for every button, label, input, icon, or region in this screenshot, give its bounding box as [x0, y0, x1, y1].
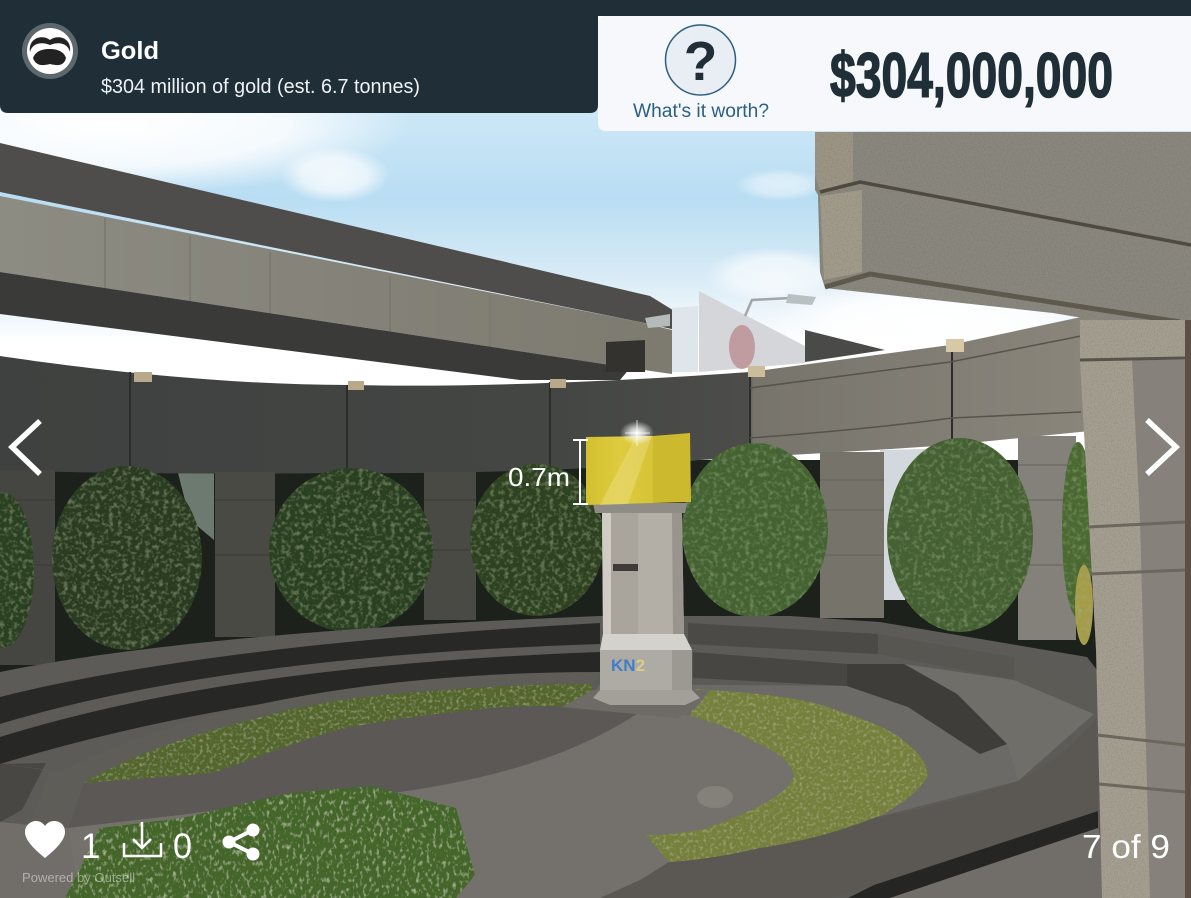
foreground shrub — [65, 786, 475, 898]
elevated guideway — [0, 143, 885, 380]
heading: Gold — [101, 37, 159, 65]
icon: heart — [25, 821, 65, 858]
grass strips — [84, 684, 928, 862]
hedges behind wall — [0, 438, 1094, 650]
circular paved pad — [68, 706, 794, 898]
sky — [0, 55, 1191, 395]
arrow: previous — [12, 421, 40, 474]
subtitle: $304 million of gold (est. 6.7 tonnes) — [101, 76, 420, 98]
powered by credit: Powered by Outsell — [22, 870, 135, 885]
toolbar: social controls — [22, 821, 260, 885]
gold cube — [586, 420, 691, 505]
billboard and lamp post — [606, 291, 816, 372]
label: What's it worth? — [633, 101, 769, 122]
icon: share — [222, 824, 260, 860]
panel: title — [0, 0, 598, 113]
shadowed kerb and lower ground — [848, 811, 1110, 898]
dark openings behind the wall — [0, 460, 1100, 690]
outer ring walkway — [600, 717, 1098, 898]
like count: 1 — [81, 827, 100, 866]
height bracket: 0.7m — [508, 440, 588, 504]
wall columns — [0, 436, 1076, 665]
icon: download — [124, 822, 161, 856]
icon: question mark — [666, 25, 736, 95]
curved concrete wall — [0, 313, 1100, 474]
stone pedestal — [562, 503, 710, 718]
page counter: 7 of 9 — [1082, 828, 1170, 865]
KN graffiti: KN2 — [611, 656, 645, 675]
right concrete beam — [815, 132, 1191, 322]
right concrete pillar — [1080, 320, 1191, 898]
arrow: next — [1147, 420, 1176, 474]
icon: question mark: ? — [684, 30, 717, 92]
panel: what's it worth — [598, 16, 1191, 131]
amphitheatre steps — [0, 616, 1120, 898]
height bracket: 0.7m: 0.7m — [508, 462, 570, 492]
top header bar — [0, 0, 1191, 16]
icon: logo — [22, 23, 78, 79]
download count: 0 — [173, 827, 192, 866]
